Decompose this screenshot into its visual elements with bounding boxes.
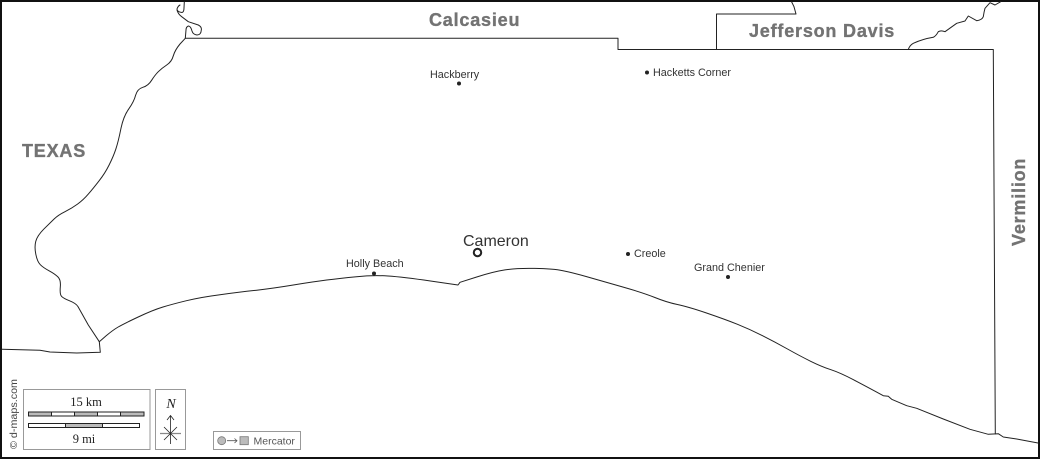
parish boundary xyxy=(185,2,995,434)
Gulf coastline xyxy=(99,268,1038,443)
place: Hacketts Corner: Hacketts Corner xyxy=(653,67,731,79)
label: TEXAS: TEXAS xyxy=(22,141,86,161)
place: Cameron: Cameron xyxy=(463,233,529,250)
place: Hackberry: Hackberry xyxy=(430,69,480,81)
km scale bar xyxy=(28,412,144,416)
place: Holly Beach xyxy=(346,258,404,276)
label: Jefferson Davis: Jefferson Davis xyxy=(749,21,895,41)
scale box xyxy=(24,390,150,450)
Jefferson Davis / Vermilion river xyxy=(908,2,1001,49)
scale box: 9 mi xyxy=(73,432,96,446)
place: Creole: Creole xyxy=(634,248,666,260)
Texas border river xyxy=(2,2,201,353)
place: Grand Chenier: Grand Chenier xyxy=(694,262,765,274)
projection box: Mercator: Mercator xyxy=(254,436,295,448)
credit: d-maps.com: © d-maps.com xyxy=(8,379,20,449)
scale box: 15 km xyxy=(70,395,102,409)
mile scale bar xyxy=(28,424,140,428)
place: Holly Beach: Holly Beach xyxy=(346,258,404,270)
projection box: Mercator xyxy=(214,432,300,450)
north arrow box xyxy=(156,390,186,450)
north arrow box: N xyxy=(165,397,176,412)
label: Calcasieu: Calcasieu xyxy=(429,10,520,30)
label: Vermilion: Vermilion xyxy=(1009,158,1029,246)
